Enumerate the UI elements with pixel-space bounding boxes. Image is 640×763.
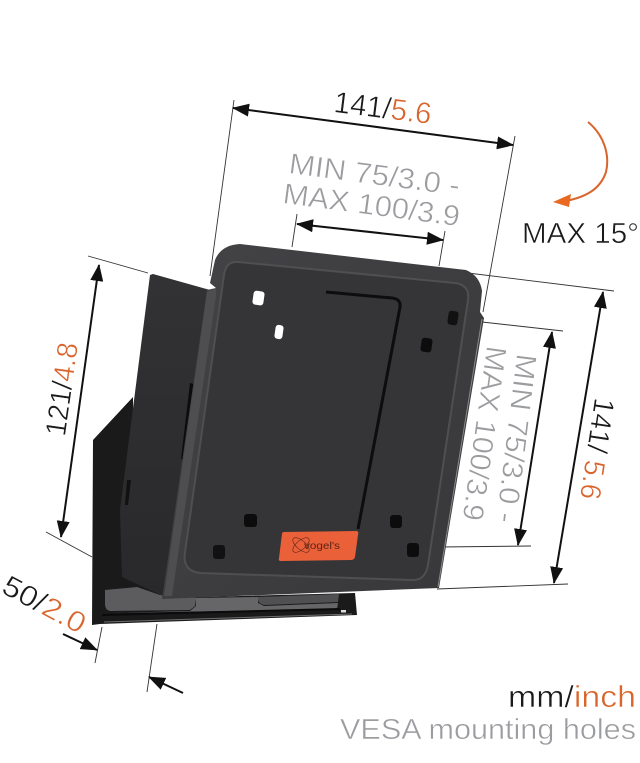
legend: units: mm/inch xyxy=(508,679,636,714)
right flange edge xyxy=(438,319,482,587)
VESA width label: MAX 100/3.9 xyxy=(281,178,462,233)
recess xyxy=(326,292,400,529)
VESA width label xyxy=(281,148,462,233)
arm box xyxy=(120,274,210,596)
tilt arrow xyxy=(553,122,607,207)
dimension arrow: right height xyxy=(554,292,603,583)
VESA height label xyxy=(456,344,542,525)
dimension arrow: VESA width xyxy=(297,224,443,240)
depth arrow left xyxy=(63,634,97,650)
VESA height label: MAX 100/3.9 xyxy=(456,344,512,523)
embossed panel xyxy=(185,262,468,580)
VESA height label: MIN 75/3.0 - xyxy=(489,352,542,525)
legend: VESA mounting holes: VESA mounting holes xyxy=(340,714,636,746)
depth arrow right xyxy=(149,677,183,693)
dimension arrow: left height xyxy=(61,265,99,537)
extension lines xyxy=(46,100,614,692)
left flange highlight xyxy=(164,288,216,596)
wall plate xyxy=(92,397,357,625)
dimension arrow: VESA height xyxy=(518,332,552,545)
logo label xyxy=(279,531,358,561)
tilt label: MAX 15° xyxy=(522,218,639,250)
dimension arrow: top width xyxy=(233,108,513,145)
mounting holes xyxy=(213,290,459,559)
logo label: vogel's xyxy=(304,540,340,552)
dimension label: left height: 121/4.8 xyxy=(40,340,85,438)
VESA width label: MIN 75/3.0 - xyxy=(287,148,462,202)
front plate xyxy=(162,244,484,599)
mount product xyxy=(92,244,484,625)
dimension label: right height: 141/ 5.6 xyxy=(573,396,620,502)
dimension label: top width: 141/5.6 xyxy=(332,86,433,131)
